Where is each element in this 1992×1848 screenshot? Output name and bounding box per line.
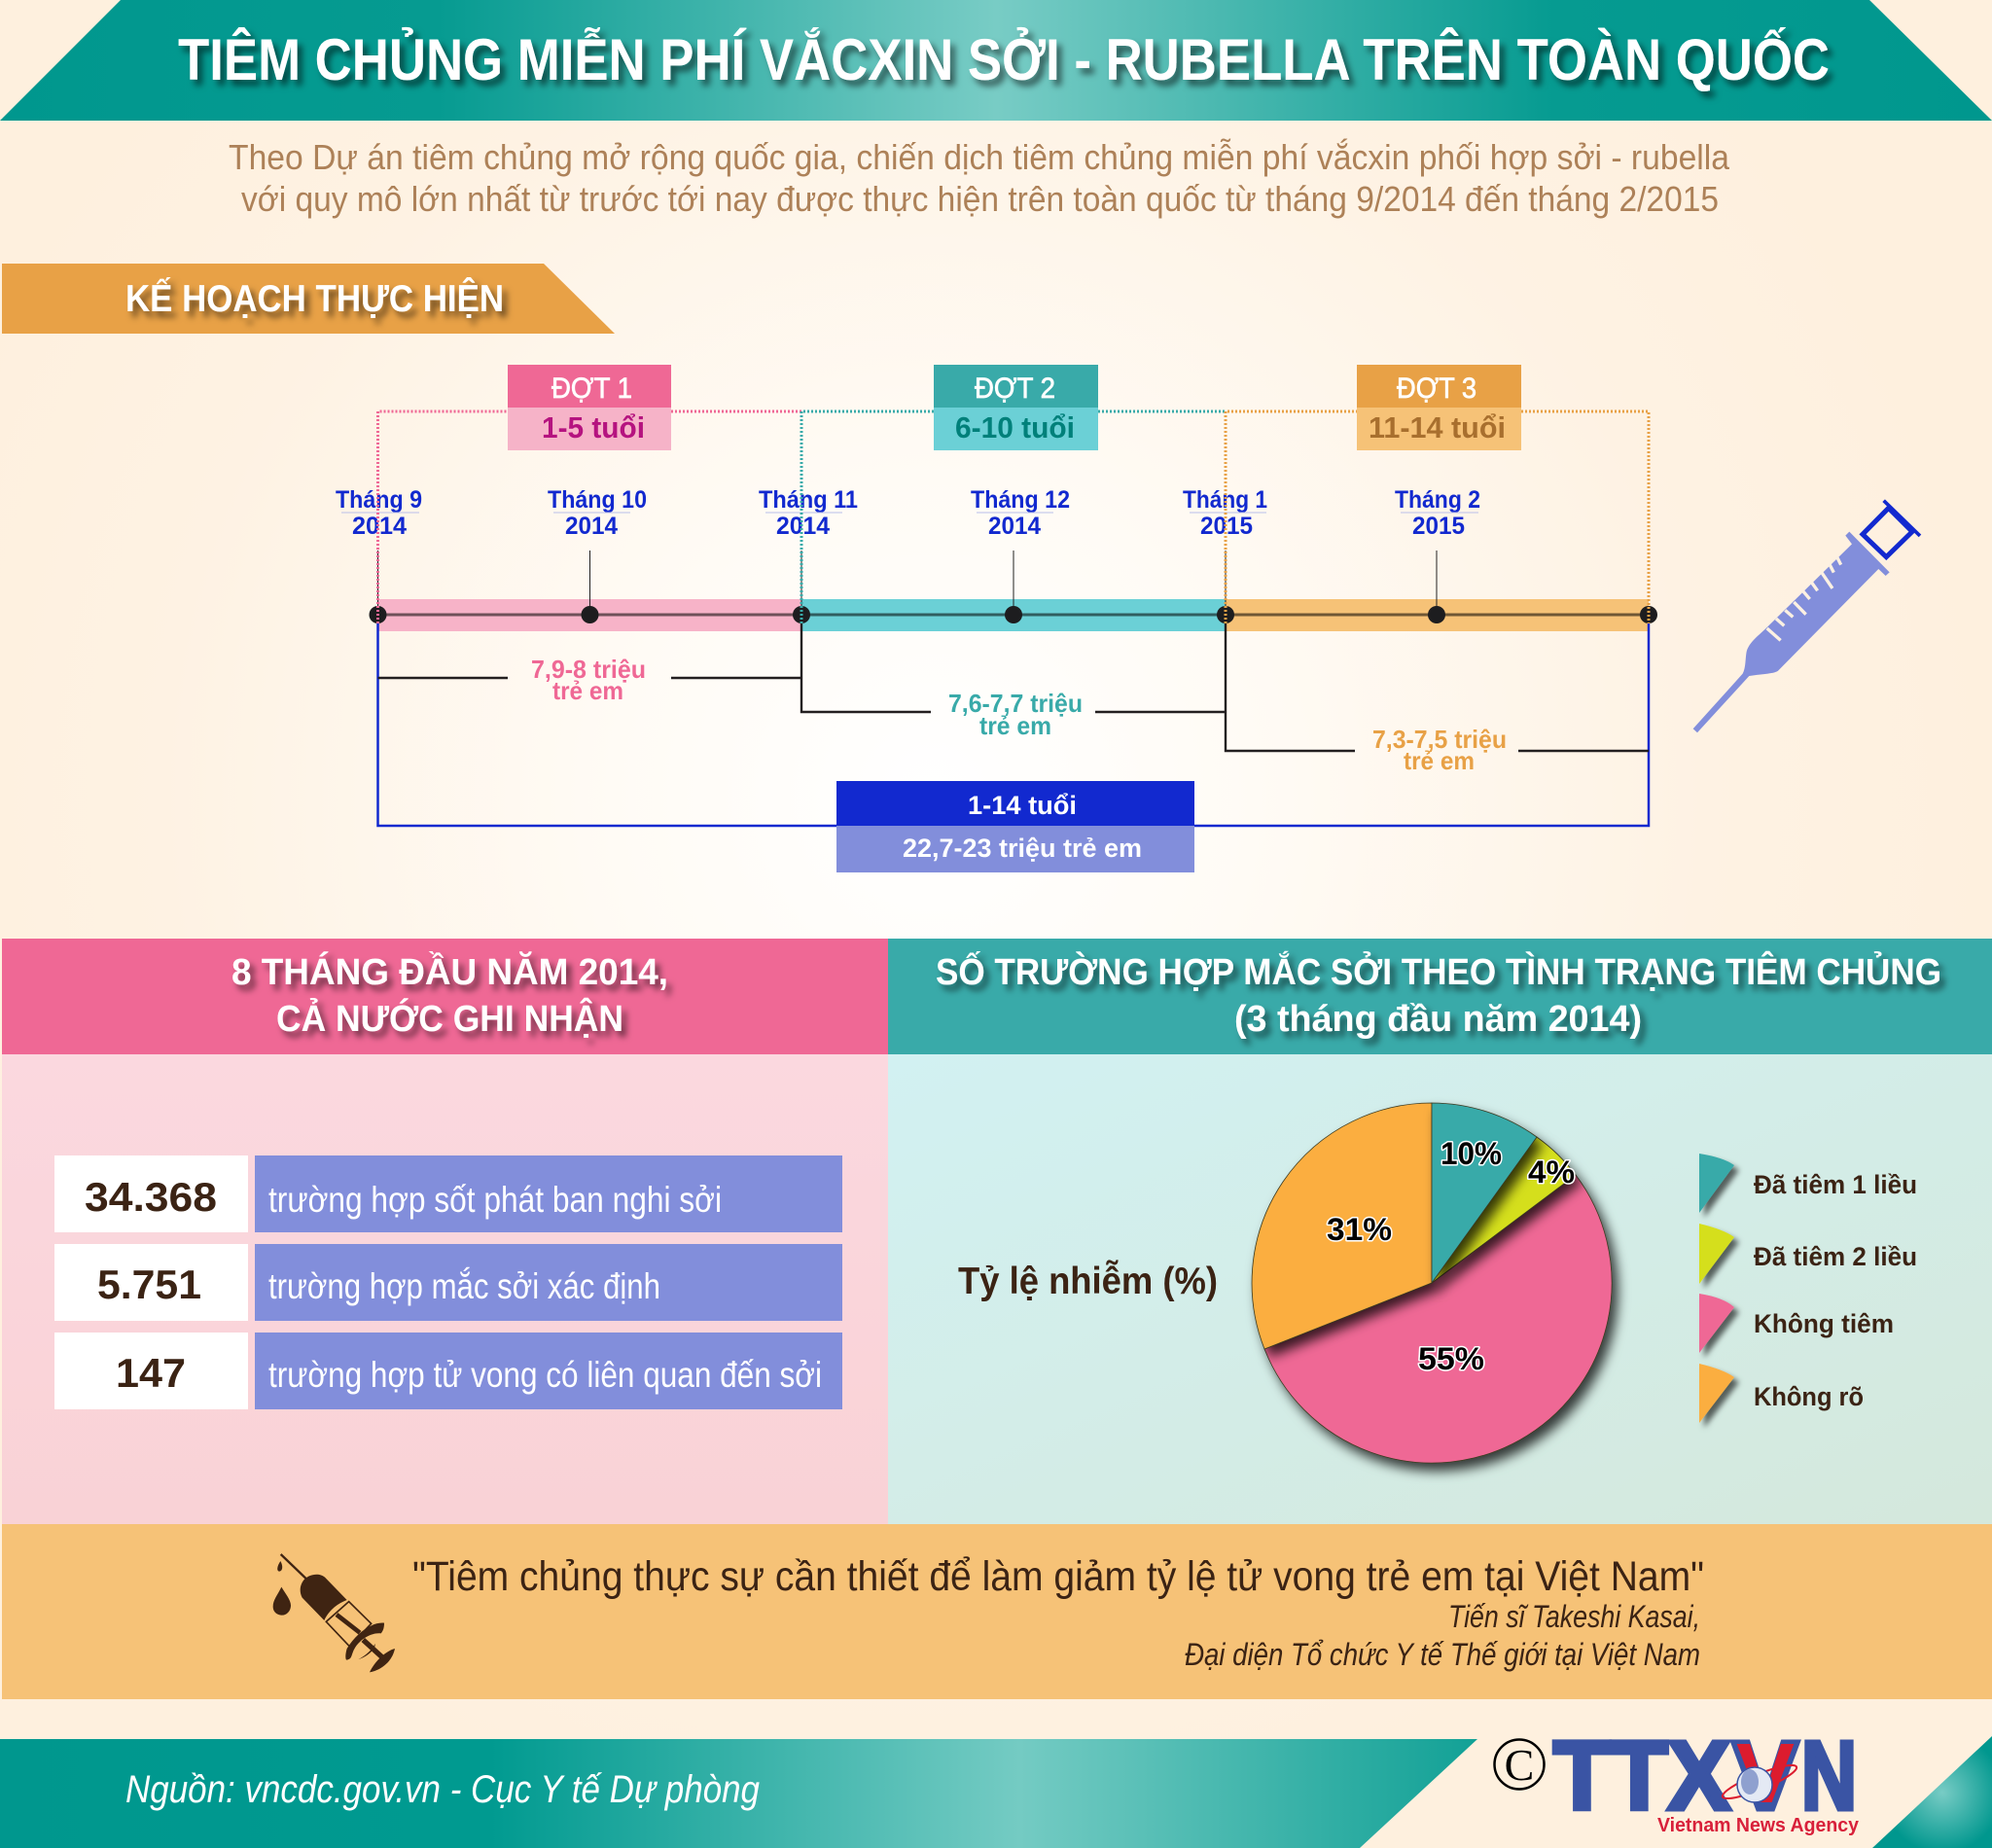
logo: TTXVN: C [1505,1740,1534,1790]
month labels [336,486,1480,540]
phase 1 label [508,365,671,450]
quote band: Đại diện Tổ chức Y tế Thế giới tại Việt Nam [1185,1637,1700,1672]
phase 3 label: ĐỢT 3 [1397,373,1476,405]
stat row: deaths: trường hợp tử vong có liên quan đến sởi [268,1355,822,1395]
chart title: Tỷ lệ nhiễm (%) [958,1260,1218,1302]
total callout: 1-14 tuổi [968,791,1077,820]
phase 2 children count: trẻ em [979,711,1051,740]
intro text: Theo Dự án tiêm chủng mở rộng quốc gia, chiến dịch tiêm chủng miễn phí vắcxin phối hợp sởi - rubella [229,137,1730,177]
title banner [0,0,1992,121]
logo: TTXVN: N [1801,1722,1857,1830]
footer source band [0,1739,1477,1848]
month labels: Tháng 9 [336,486,422,514]
stat row: confirmed [54,1244,842,1321]
pie chart [1252,1103,1612,1463]
phase 2 label: ĐỢT 2 [975,373,1055,405]
quote band: Tiến sĩ Takeshi Kasai, [1448,1599,1700,1634]
quote band [2,1524,1992,1699]
legend: Không tiêm [1754,1309,1894,1338]
phase 3 children count [1372,725,1507,775]
pie chart: 31% [1327,1212,1392,1247]
pie chart: 55% [1418,1341,1484,1376]
month labels: 2014 [988,513,1041,540]
month labels: 2014 [352,513,407,540]
panel: vaccination status [888,939,1992,1524]
phase 1 children count: 7,9-8 triệu [531,655,646,684]
phase 3 label: 11-14 tuổi [1369,410,1506,444]
stat row: suspected: 34.368 [85,1174,217,1220]
month labels: 2014 [776,513,830,540]
logo: TTXVN: TTX [1553,1722,1730,1830]
panel: cases in 2014 [2,939,888,1524]
icon: dark syringe [273,1554,395,1672]
stat row: suspected: trường hợp sốt phát ban nghi sởi [268,1180,722,1220]
stat row: suspected [54,1155,842,1232]
stat row: deaths [54,1333,842,1409]
month labels: Tháng 11 [759,486,858,514]
month labels: Tháng 10 [548,486,647,514]
timeline bars [377,599,1649,631]
phase 1 label: ĐỢT 1 [551,373,632,405]
panel heading: cases: CẢ NƯỚC GHI NHẬN [276,997,623,1040]
brackets: phase periods [377,615,1649,751]
panel heading: vaccination status [888,939,1992,1054]
stat row: confirmed: 5.751 [97,1262,201,1307]
phase 1 children count [531,655,646,705]
logo: TTXVN: Vietnam News Agency [1657,1815,1860,1836]
phase 3 children count: 7,3-7,5 triệu [1372,725,1507,754]
phase 2 label: 6-10 tuổi [955,410,1075,444]
panel heading: cases [2,939,888,1054]
logo: TTXVN: V [1736,1726,1795,1821]
stat row: deaths: 147 [116,1350,186,1396]
section heading: plan [2,264,615,334]
phase 1 children count: trẻ em [552,676,623,705]
pie chart: 4% [1528,1155,1575,1190]
pie chart: 10% [1441,1136,1502,1171]
month labels: 2014 [565,513,618,540]
month labels: 2015 [1200,513,1253,540]
legend: Không rõ [1754,1382,1864,1411]
phase 2 children count [948,689,1083,740]
panel heading: cases: 8 THÁNG ĐẦU NĂM 2014, [231,950,668,993]
month labels: 2015 [1412,513,1465,540]
bracket: total period [377,615,1649,826]
month labels: Tháng 12 [971,486,1070,514]
legend: Đã tiêm 2 liều [1754,1242,1917,1271]
icon: blue syringe [1693,501,1920,732]
legend [1699,1154,1917,1423]
phase 3 children count: trẻ em [1404,746,1475,775]
phase 1 label: 1-5 tuổi [542,410,645,444]
logo: TTXVN: V [1732,1722,1798,1830]
month labels: Tháng 1 [1183,486,1267,514]
footer corner [1872,1736,1992,1848]
stat row: confirmed: trường hợp mắc sởi xác định [268,1266,660,1306]
quote band: "Tiêm chủng thực sự cần thiết để làm giảm tỷ lệ tử vong trẻ em tại Việt Nam" [412,1553,1704,1600]
logo: TTXVN [1494,1722,1860,1836]
phase 3 label [1357,365,1521,450]
footer source band: Nguồn: vncdc.gov.vn - Cục Y tế Dự phòng [125,1768,760,1811]
month labels: Tháng 2 [1395,486,1480,514]
phase 2 children count: 7,6-7,7 triệu [948,689,1083,718]
total callout [836,781,1194,872]
legend: Đã tiêm 1 liều [1754,1170,1917,1199]
phase 2 label [934,365,1098,450]
intro text: với quy mô lớn nhất từ trước tới nay được thực hiện trên toàn quốc từ tháng 9/2014 đến tháng 2/2015 [241,179,1719,219]
panel heading: vaccination status: (3 tháng đầu năm 2014) [1234,999,1642,1040]
dotted frames for phases [377,411,1649,623]
timeline axis with ticks and dots [370,551,1657,623]
intro text [229,137,1730,219]
section heading: plan: KẾ HOẠCH THỰC HIỆN [125,277,504,320]
total callout: 22,7-23 triệu trẻ em [903,834,1142,863]
